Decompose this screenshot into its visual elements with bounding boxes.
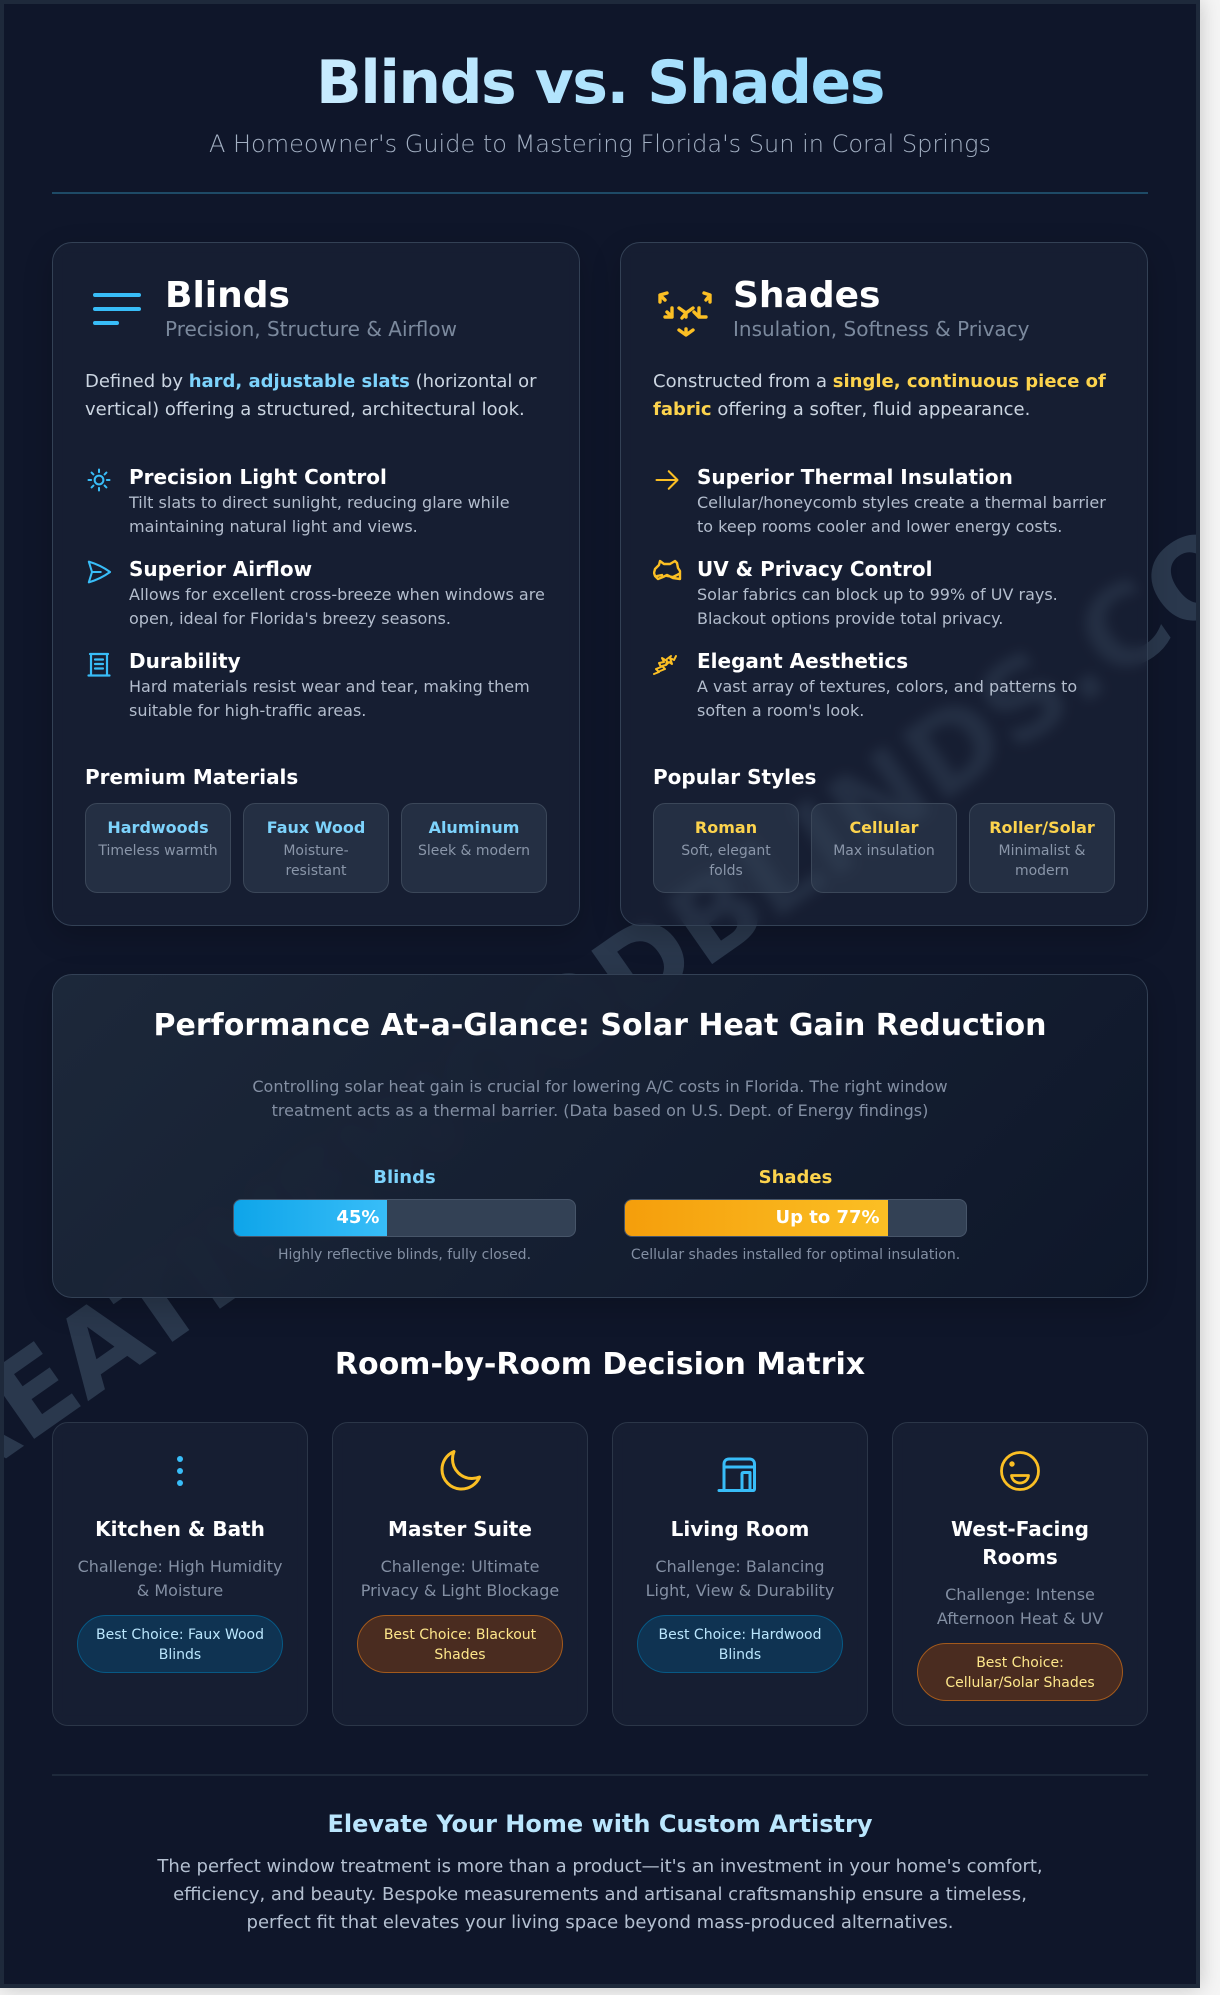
chip: cellular	[811, 803, 957, 893]
chip: cellular: Max insulation	[833, 843, 935, 859]
icon: blinds lines	[93, 293, 141, 325]
chip: roller/solar: Minimalist & modern	[999, 843, 1085, 879]
feature: durability	[87, 649, 530, 720]
room card: master suite: Challenge: Ultimate Privacy & Light Blockage	[361, 1557, 559, 1600]
chip: roman: Roman	[695, 818, 757, 837]
chip: aluminum: Sleek & modern	[418, 843, 530, 859]
icon: shades arrows	[658, 291, 712, 337]
feature: thermal insulation	[656, 465, 1106, 536]
footer text: The perfect window treatment is more than a product—it's an investment in your home's comfort, efficiency, and beauty. Bespoke measurements and artisanal craftsmanship ensure a timeless, perfect fit that elevates your living space beyond mass-produced alternatives.	[157, 1856, 1043, 1933]
icon: moon	[440, 1450, 482, 1490]
feature: superior airflow: Superior Airflow	[129, 557, 312, 581]
icon: arrow	[656, 470, 678, 490]
feature: superior airflow: Allows for excellent cross-breeze when windows are open, ideal for Florida's breezy seasons.	[129, 585, 545, 628]
room card: kitchen and bath: Kitchen & Bath	[95, 1517, 265, 1541]
best choice: faux wood	[77, 1615, 283, 1673]
feature: uv and privacy: Solar fabrics can block up to 99% of UV rays. Blackout options provide total privacy.	[697, 585, 1058, 628]
chip: roller/solar: Roller/Solar	[989, 818, 1095, 837]
feature: durability: Hard materials resist wear and tear, making them suitable for high-traffic areas.	[129, 677, 530, 720]
blinds description: Defined by hard, adjustable slats (horizontal or vertical) offering a structured, architectural look.	[85, 370, 537, 420]
bar chart: blinds 45%: 45%	[336, 1207, 379, 1228]
room card: kitchen and bath: Challenge: High Humidity & Moisture	[78, 1557, 282, 1600]
panel: blinds	[52, 242, 580, 926]
icon: scribble	[653, 655, 677, 675]
heading: premium materials: Premium Materials	[85, 765, 298, 789]
icon: column	[87, 652, 111, 677]
best choice: cellular/solar	[917, 1643, 1123, 1701]
room card: living room	[612, 1422, 868, 1726]
bar chart: shades 77%: Shades	[759, 1167, 832, 1188]
icon: sun	[88, 468, 110, 492]
feature: elegant aesthetics: Elegant Aesthetics	[697, 649, 908, 673]
bar chart: shades 77%	[624, 1167, 967, 1263]
room card: west-facing rooms: West-Facing Rooms	[951, 1517, 1089, 1569]
feature: precision light control: Tilt slats to direct sunlight, reducing glare while maintaining natural light and views.	[129, 493, 510, 536]
icon: shield scribble	[653, 560, 682, 580]
heading: blinds: Blinds	[165, 275, 290, 316]
room card: master suite: Master Suite	[388, 1517, 532, 1541]
best choice: hardwood	[637, 1615, 843, 1673]
panel: shades	[620, 242, 1148, 926]
icon: paper plane	[88, 560, 112, 584]
feature: precision light control: Precision Light Control	[129, 465, 387, 489]
chip: hardwoods	[85, 803, 231, 893]
bar chart: blinds 45%	[233, 1167, 576, 1263]
feature: uv and privacy: UV & Privacy Control	[697, 557, 933, 581]
chip: roman	[653, 803, 799, 893]
bar chart: shades 77%: Cellular shades installed for optimal insulation.	[631, 1247, 960, 1263]
best choice: blackout: Best Choice: Blackout Shades	[384, 1627, 536, 1663]
feature: precision light control	[88, 465, 510, 536]
bar chart: blinds 45%: Blinds	[373, 1167, 436, 1188]
title: Blinds vs. Shades	[316, 48, 884, 118]
best choice: faux wood: Best Choice: Faux Wood Blinds	[96, 1627, 264, 1663]
icon: window door	[718, 1458, 756, 1492]
best choice: cellular/solar: Best Choice: Cellular/Solar Shades	[945, 1655, 1095, 1691]
footer heading: Elevate Your Home with Custom Artistry	[328, 1810, 872, 1838]
feature: elegant aesthetics: A vast array of textures, colors, and patterns to soften a room's look.	[697, 677, 1077, 720]
heading: popular styles: Popular Styles	[653, 765, 816, 789]
title	[52, 47, 1148, 119]
chip: roman: Soft, elegant folds	[681, 843, 771, 879]
bar chart: shades 77%: Up to 77%	[775, 1207, 880, 1228]
shades tagline: Insulation, Softness & Privacy	[733, 317, 1030, 341]
best choice: hardwood: Best Choice: Hardwood Blinds	[658, 1627, 822, 1663]
blinds tagline: Precision, Structure & Airflow	[165, 317, 457, 341]
style chips	[653, 803, 1115, 893]
icon: dots	[177, 1456, 183, 1486]
room card: master suite	[332, 1422, 588, 1726]
room card: west-facing rooms: Challenge: Intense Afternoon Heat & UV	[937, 1585, 1103, 1628]
heading: shades: Shades	[733, 275, 880, 316]
chip: aluminum: Aluminum	[429, 818, 519, 837]
performance description: Controlling solar heat gain is crucial for lowering A/C costs in Florida. The right window treatment acts as a thermal barrier. (Data based on U.S. Dept. of Energy findings)	[252, 1077, 948, 1120]
material chips	[85, 803, 547, 893]
shades description: Constructed from a single, continuous piece of fabric offering a softer, fluid appearance.	[653, 370, 1106, 420]
feature: durability: Durability	[129, 649, 241, 673]
chip: faux wood: Faux Wood	[267, 818, 365, 837]
feature: uv and privacy	[653, 557, 1058, 628]
feature: elegant aesthetics	[653, 649, 1077, 720]
chip: faux wood	[243, 803, 389, 893]
room card: west-facing rooms	[892, 1422, 1148, 1726]
chip: faux wood: Moisture-resistant	[283, 843, 349, 879]
icon: smile	[1000, 1451, 1040, 1491]
room card: living room: Living Room	[671, 1517, 809, 1541]
feature: superior airflow	[88, 557, 545, 628]
chip: cellular: Cellular	[849, 818, 919, 837]
chip: aluminum	[401, 803, 547, 893]
chip: hardwoods: Hardwoods	[107, 818, 209, 837]
chip: roller/solar	[969, 803, 1115, 893]
heading: room matrix: Room-by-Room Decision Matrix	[335, 1347, 865, 1382]
best choice: blackout	[357, 1615, 563, 1673]
feature: thermal insulation: Superior Thermal Insulation	[697, 465, 1013, 489]
feature: thermal insulation: Cellular/honeycomb styles create a thermal barrier to keep rooms cooler and lower energy costs.	[697, 493, 1106, 536]
bar chart: blinds 45%: Highly reflective blinds, fully closed.	[278, 1247, 531, 1263]
subtitle: A Homeowner's Guide to Mastering Florida's Sun in Coral Springs	[209, 130, 991, 158]
panel: performance	[52, 974, 1148, 1298]
chip: hardwoods: Timeless warmth	[98, 843, 218, 859]
heading: performance: Performance At-a-Glance: Solar Heat Gain Reduction	[154, 1008, 1046, 1043]
room card: living room: Challenge: Balancing Light, View & Durability	[646, 1557, 834, 1600]
room card: kitchen and bath	[52, 1422, 308, 1726]
